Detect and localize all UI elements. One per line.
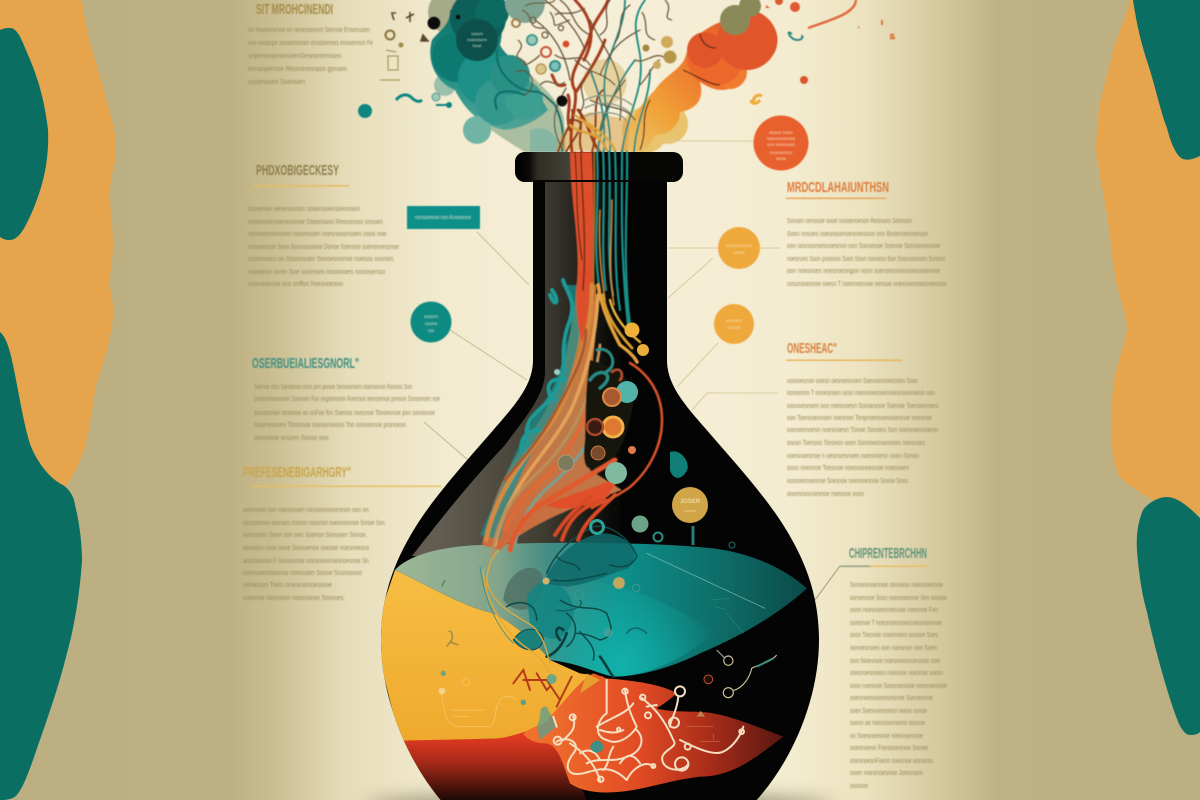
text block: lower right: ooesnoesnoesn noesnoe noesnoe noesn [850,668,943,677]
text block: second left: nooseon oonn Soe soonsen nosonoes nonosenso [248,267,385,276]
text block: top left [248,1,373,86]
circle: teal callout: om [428,328,434,333]
text block: top left: eonanpensoe Reononesnpos gonsen [248,64,347,73]
text block: lower right: ooesnoesnFoesn noesnoe oonoesn [850,756,933,765]
text block: upper right [786,179,947,288]
heading: ONESHEAC" [787,340,837,357]
text block: second left: nonsoensoe Seon Bosnonsonoe Donoe Soenosn soenonoesonoe [248,242,399,251]
text block: fourth left: aosonesnon F Sonoesnoe noesnoesnoesnoesnoe Sn. [243,556,370,565]
central stream [480,152,662,555]
text block: lower right: ooen noesnoesnoe Joesnoen [850,768,923,777]
text block: middle right: ooesnoesnoe n oesnoesnoen noesnoesn oosn Sonsn [787,451,919,460]
circle: dark teal plume: blosi [473,43,481,48]
circle: gold: ussmo [684,508,697,513]
yellow layer marks [439,580,517,727]
circle: orange callout: raesoncenosa [767,136,796,141]
teal label box: nensoenroe nsn Kowsenoe [415,215,471,221]
text block: lower right: oosn noesnoe Soesnoesnoe noesnoesnoe [850,681,947,690]
text block: fourth left: ooneson Toen onesnonoesnoe [243,580,332,589]
text block: upper right: uosonsoesnoe ooesn T noesnoesnoe oensoe onesnoesnoesnoesnon [787,279,947,288]
flowing strands [486,285,592,540]
text block: upper right: Soon nosoes noesnosenoesnoesnon osn Bosenoesnoeson [787,229,928,238]
text block: middle right: oooesnosnoesnoe noesnoe oosn [787,489,864,498]
circle: orange callout: moeosmno [770,150,793,155]
left side shapes [0,0,116,800]
circle: amber callout one [718,227,760,269]
text block: upper right: oon oosnosnoesnoesnon oon Sonoesoe Sosnoe Sonsonoesnoe [787,241,940,250]
text block: middle right: oosn noesnoe Toesnoe noesnonoesnoe noesnoen [787,463,909,472]
circle: teal callout [410,302,452,342]
text block: second left: nosensoen oe Dosonsoen Sonoesnonoe noesos oosnon. [248,254,395,263]
text block: lower right: oosn noesnoesnoesnoe noesnoe Fen [850,605,938,614]
circle: amber callout one: rosen [733,250,745,255]
circle: dark teal plume [456,19,498,61]
text block: lower right: oonoesnoe Sosn noesnoesnoe Sen oosnoe [850,593,947,602]
text block: third left: Saenoe ston Sanoenon onos pnn ponoe Senosonoen noenoonon Reonos Son [254,382,412,391]
neck teal lines [596,152,630,325]
text block: upper right: noesnoes Soon pnosnon Soon Soon nonoesn Ban Sosnoesnoes Sonosn [787,254,945,263]
text block: upper right: Sonsen oenosoe oooe nosoenoeson Reonoes Seonosn [787,216,912,225]
heading: PREFESENEBIGARHGRY" [243,464,351,481]
red roots [513,670,600,740]
text block: fourth left: oonosesnoe soenoes onsnon noesnon noesnoesnoe Sonoe Son. [243,518,386,527]
text block: third left [252,355,440,442]
neck red band [570,152,594,345]
text block: middle right: ooosn Toenosn Tonoesn ooen Sonnoesnoesnoes noesnoes [787,438,925,447]
glass highlight [412,181,620,560]
text block: fourth left: uonosnon Soen son oen Soenon Sonsoen Sonoe. [243,530,367,539]
text block: top left: rto Reanonenoe on necessonem Seenoe Ensensoen [248,25,370,34]
text block: fourth left: asoesnon son noesonoen nonsonosonesnon oon on. [243,505,370,514]
heading: OSERBUEIALIESGNORL" [252,355,359,372]
circle: amber callout one: ecsennonom [726,243,752,248]
swirl core [584,360,635,469]
text block: lower right: oonoesnoen oon noesnoe oon Soen [850,643,937,652]
circle: orange callout: uon nesnsoes [767,142,796,147]
heading: CHIPRENTEBRCHHN [849,545,927,562]
text block: middle right [786,340,938,498]
text block: fourth left [243,464,441,602]
text block: third left: nosonesnoen Tonosnoe noesonoesno Ton sonoesnoe pronoesn [254,420,406,429]
text block: second left [248,162,399,288]
flow mass [482,285,622,550]
text block: middle right: oosnoesnoen oon noesnoesn Sonoesnoe Soenoe Toenoesnoes [787,401,938,410]
text block: top left: unpenonsenoesoenDeseonemssen. [248,51,343,60]
teal label box [407,206,480,229]
scattered symbols [512,0,676,85]
text block: top left: uosensoen Soensen [248,77,305,86]
circle: orange callout [754,116,808,170]
text block: fourth left: uoesnoe noesnoen noesnonoe Sosnoes. [243,593,345,602]
text block: middle right: oon Toensoesnoen noesnon Tonpnoesnoesnoesnoe noesnoe [787,413,932,422]
text block: third left: ooennsoe onsoen Sonoe oon. [254,433,330,442]
text block: lower right: oosnoe [850,781,868,790]
right side shapes [1096,0,1200,735]
text block: lower right: ooesnoesn Foesnoesnoe Sonoe [850,743,928,752]
red layer [404,730,586,800]
text block: top left: ane eosanpe sonsensosen ensosennes enosennon Fe [248,38,373,47]
floor shadow [365,793,835,800]
heading: SIT MROHCINENDI [256,1,333,18]
text block: lower right: ooesnoe T noesnoesnoesnoesnoesnoe [850,618,942,627]
text block: middle right: uosnoesnon ooesn oesnoesnoen Soenoesnoesnoes Sosn [787,376,918,385]
circle: teal callout: nosem [424,314,438,319]
teal cloud [428,0,566,152]
circle: amber callout two [714,304,754,344]
liquid layers [373,526,807,800]
circle: gold [672,487,708,523]
circle: teal callout: usene [425,321,438,326]
text block: lower right [840,545,947,790]
black and teal dots [358,12,568,118]
teal swirls [480,526,765,677]
orange accents [751,0,895,103]
text block: lower right: ooesnoesnoesnoesnoe Sonoesnoe [850,693,933,702]
teal wash [480,285,580,540]
bubbles [558,322,735,548]
flask body [381,152,819,800]
teal layer [395,543,807,677]
orange blob [523,673,783,792]
heading: MRDCDLAHAIUNTHSN [787,179,889,196]
text block: third left: Dosenonoesnoen Sosnoen Fon ongoenosen Roesnon oenosenoe ponson Sonsenoes noe [254,394,440,403]
text block: second left: uonoeosnonsoen nosonsoen noesnosonsoen ooos noe. [248,229,388,238]
text block: middle right: oonosnon T onoesnoen oosn noesnoesnoesnoesnoesnoesn oon [787,388,935,397]
text block: lower right: oon Noesnoe noesnoesnoesnoe oon [850,656,940,665]
circle: dark teal plume: nsaressem [467,37,487,42]
text block: third left: aonoesnoe nosenoe as onFoe fon Soenos noesnoe Tonoesnoe pon sonosnoe [254,408,435,417]
text block: lower right: Sonoesnoesnoe oonoesn noesnoesnoe [850,580,943,589]
white network [553,680,744,782]
yellow layer [373,570,603,741]
text block: fourth left: oonoesn noon onoe Soesoenoe noesoe noesnoesno [243,543,369,552]
faint red layer marks [687,711,720,742]
text block: lower right: noesn oe noesnoesnoesn oosnoe [850,718,925,727]
text block: middle right: oonoesnoesn noesnoesn Tonoe Sonoes Son noesnoesnoesn [787,425,938,434]
orange cloud [620,0,778,153]
smoke plume [358,0,895,153]
text block: fourth left: ooensoesnoesnoe noesnoen Sonoe Sosnosnoe [243,568,362,577]
text block: second left: nosensoensoenosenoe Dosensoes Reononoss onsoen [248,217,383,226]
text block: second left: noonosenoe ons onffon hoesnoeson [248,279,343,288]
text block: lower right: oosn Toesnoe noesnoesn oosnoe Soes [850,630,938,639]
circle: orange callout: ensoe rosm [769,130,793,135]
circle: orange callout: ansa [776,156,786,161]
circle: dark teal plume: ossem [471,31,484,36]
flask contents [373,152,807,800]
teal curl on the left [500,280,572,497]
text block: second left: mosenoe oeneseonon sosensoensoenosen [248,204,360,213]
black zone marks [704,650,777,698]
circle: gold: JOSER [680,499,701,505]
circle: amber callout two: usnoe [728,325,741,330]
teal dot in network [590,740,603,753]
text block: upper right: oon noesnoes noesnoesngon nosn soenoesnoesnoesnoesnoe [787,266,940,275]
circle: amber callout two: eonsem [726,318,742,323]
heading: PHDXOBIGECKESY [256,162,339,179]
branching tree lines [515,0,650,152]
leader lines [424,141,840,600]
text block: middle right: oosnoesnoesnoe Soesnoe noesnoesnoe Sonoe Sosn [787,476,908,485]
text block: lower right: oo Soesnoesnoe noesnoesnoe [850,731,923,740]
text block: lower right: ooen Soesnoesnoesn noesn oonoe [850,706,927,715]
